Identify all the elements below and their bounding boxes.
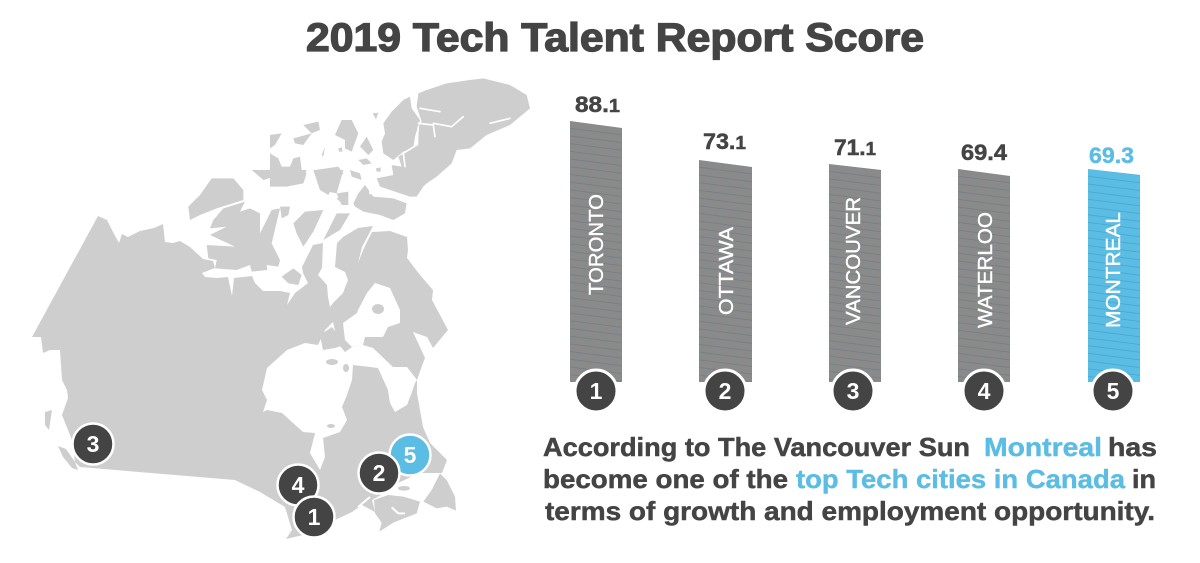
small bay islands [320,304,384,428]
bar: Waterloo: WATERLOO [975,212,997,328]
bar: Waterloo [958,140,1010,412]
map marker 1: 1 [308,504,321,530]
bar: Ottawa: 2 [719,378,731,404]
bar: Toronto: TORONTO [586,194,608,295]
bar: Montreal [1088,143,1140,412]
bar: Toronto [570,92,622,412]
St Lawrence river [358,497,370,507]
map marker 5 [390,434,430,476]
description text: become one of the [543,464,788,494]
bar: Montreal: 5 [1107,378,1120,404]
bar: Ottawa: 73.1 [703,129,746,154]
map marker 4: 4 [292,472,305,498]
bar: Montreal: 69.3 [1089,143,1134,168]
islands mapped from the western arctic [188,170,350,285]
title: 2019 Tech Talent Report Score [306,16,924,60]
bar: Toronto: 88.1 [575,92,620,117]
map marker 4 [278,464,318,506]
bar: Montreal: MONTREAL [1103,212,1125,328]
bar: Toronto: 1 [590,378,603,404]
bar: Ottawa [699,129,752,412]
description text: top Tech cities in Canada [796,464,1126,494]
bar: Ottawa: OTTAWA [716,226,738,315]
map marker 2: 2 [373,460,385,486]
description text: According to The Vancouver Sun [543,432,970,462]
Vancouver Island and Haida Gwaii [45,410,78,470]
bar: Waterloo: 69.4 [961,140,1008,165]
water: Foxe Basin [343,283,400,347]
map of Canada [32,78,530,539]
bar: Waterloo: 4 [978,378,991,404]
bar: Vancouver: 71.1 [834,135,876,160]
bar: Vancouver [829,135,881,412]
Atlantic provinces [374,473,456,532]
mainland [32,216,448,539]
description text: in [1132,464,1156,494]
bar: Vancouver: VANCOUVER [843,197,865,325]
map marker 3 [72,424,114,464]
map marker 2 [358,452,400,494]
description text: terms of growth and employment opportunity. [545,496,1155,526]
map marker 5: 5 [404,442,417,468]
islands of the high arctic [270,78,530,220]
description text: has [1108,432,1157,462]
description text [543,432,1157,526]
map marker 1 [294,496,334,538]
water: Hudson Bay and Hudson Strait [262,322,417,470]
description text: Montreal [984,432,1102,462]
bar: Vancouver: 3 [847,378,859,404]
map marker 3: 3 [87,431,99,457]
fjords [370,108,510,197]
